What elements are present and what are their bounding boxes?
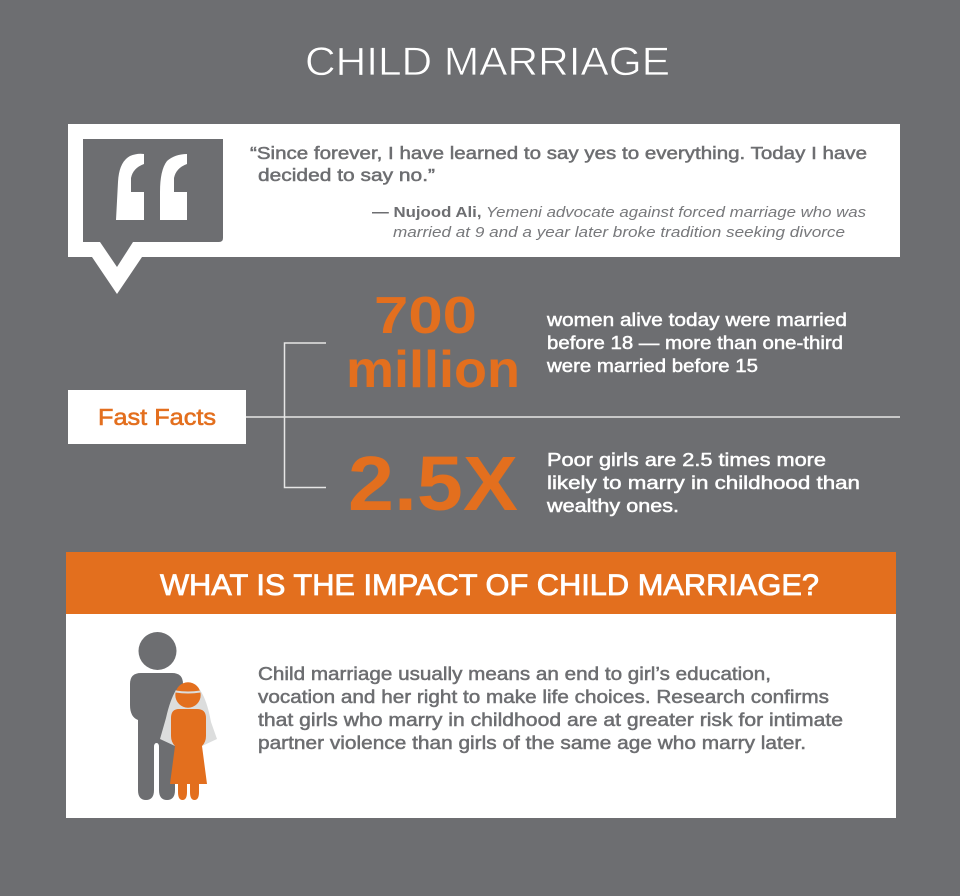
stat text: 2.5X — [546, 449, 860, 516]
fast facts connector lines — [245, 343, 900, 488]
impact text: partner violence than girls of the same age who marry later. — [258, 732, 806, 753]
veil — [160, 690, 217, 746]
bride — [170, 682, 207, 800]
stat text: 700 million: women alive today were married — [546, 309, 847, 330]
quote attribution: married at 9 and a year later broke tradition seeking divorce — [393, 224, 845, 241]
impact panel background — [66, 614, 896, 818]
stat text: 700 million: before 18 — more than one-third — [547, 332, 843, 353]
quote text: decided to say no.” — [258, 165, 435, 185]
fast facts label: Fast Facts — [98, 404, 216, 430]
impact text — [258, 663, 843, 753]
impact text: vocation and her right to make life choices. Research confirms — [258, 686, 829, 707]
panel: impact — [66, 552, 896, 818]
quote attribution — [372, 204, 867, 241]
stat text: 2.5X: wealthy ones. — [546, 495, 679, 516]
stat text: 2.5X: Poor girls are 2.5 times more — [547, 449, 826, 470]
title: CHILD MARRIAGE — [305, 40, 670, 84]
impact text: Child marriage usually means an end to girl’s education, — [258, 663, 771, 684]
fast facts label — [68, 390, 246, 444]
quote text — [250, 143, 867, 185]
quote text: “Since forever, I have learned to say yes to everything. Today I have — [250, 143, 867, 163]
quote attribution: — Nujood Ali, Yemeni advocate against forced marriage who was — [372, 204, 867, 221]
stat: 700 million — [346, 287, 520, 399]
stat: 2.5X: 2.5X — [348, 441, 518, 527]
icon: man and child bride — [130, 632, 217, 800]
panel: quote — [68, 124, 900, 294]
impact text: that girls who marry in childhood are at greater risk for intimate — [258, 709, 843, 730]
stat text: 2.5X: likely to marry in childhood than — [547, 472, 860, 493]
stat text: 700 million — [546, 309, 847, 376]
stat text: 700 million: were married before 15 — [546, 355, 758, 376]
quote bubble — [68, 124, 900, 294]
stat: 700 million: 700 — [374, 287, 477, 345]
icon: quotation marks — [83, 139, 223, 267]
stat: 700 million: million — [346, 341, 520, 399]
impact heading — [66, 552, 896, 614]
impact heading: WHAT IS THE IMPACT OF CHILD MARRIAGE? — [160, 569, 819, 602]
man — [130, 632, 183, 800]
